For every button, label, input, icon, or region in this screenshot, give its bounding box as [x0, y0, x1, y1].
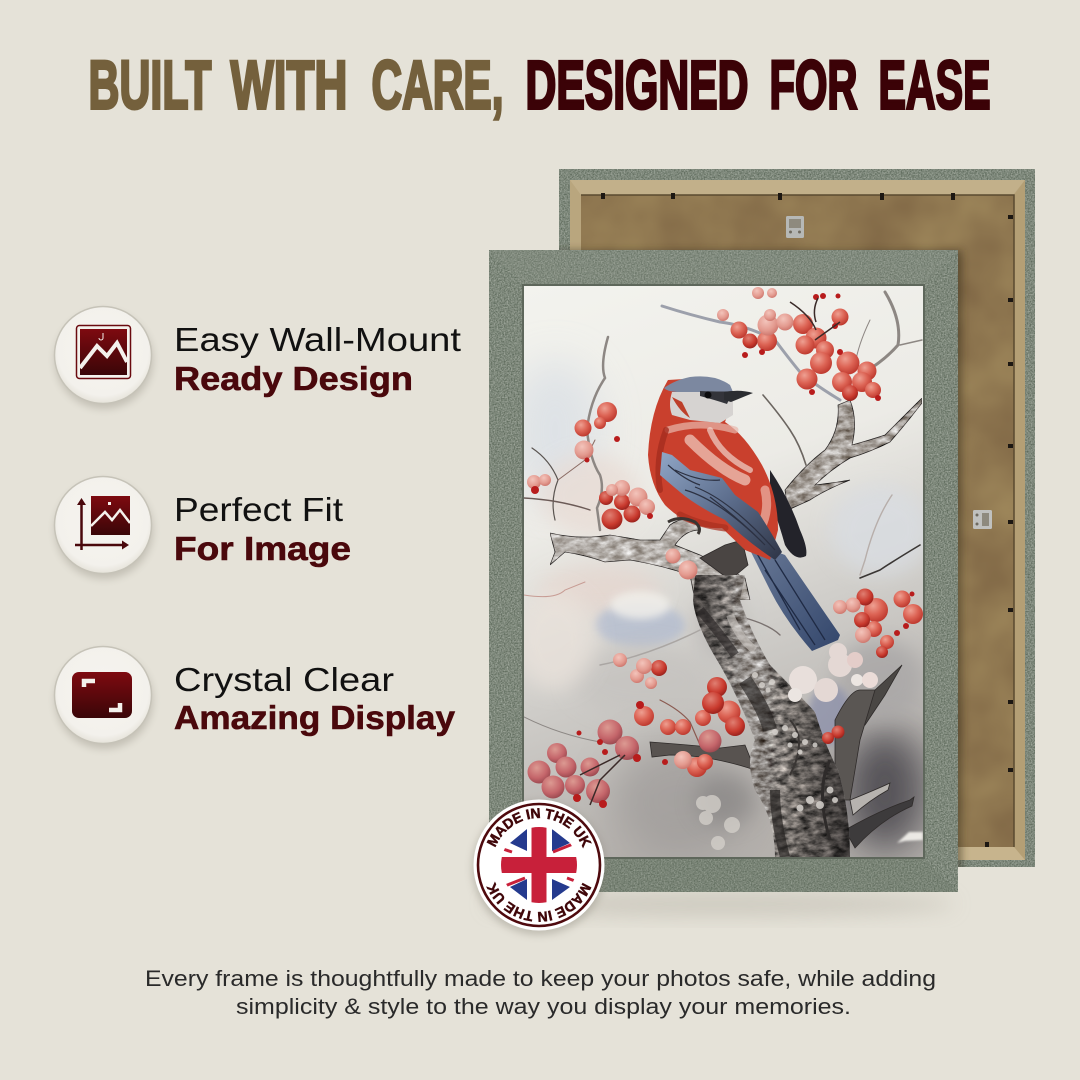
icon: display screen	[54, 646, 153, 749]
feature: crystal clear	[54, 646, 456, 749]
text: perfect fit: Perfect Fit	[174, 491, 343, 528]
caption: Every frame is thoughtfully made to keep your photos safe, while adding	[145, 966, 936, 991]
badge: made in the uk	[469, 800, 606, 938]
hanger top	[786, 216, 804, 238]
front frame shadow	[559, 246, 966, 867]
hanger right	[973, 510, 992, 529]
text: for image: For Image	[174, 530, 351, 567]
text: ready design: Ready Design	[174, 360, 413, 397]
title: WITH	[230, 46, 348, 124]
flag: union jack	[500, 826, 578, 904]
staples	[601, 193, 1013, 847]
title: CARE,	[372, 46, 504, 124]
watercolor background	[510, 286, 930, 860]
badge text	[486, 808, 592, 922]
front frame moulding	[489, 250, 958, 892]
text: crystal clear: Crystal Clear	[174, 661, 394, 698]
badge text: MADE IN THE UK	[486, 808, 592, 848]
text: easy wall-mount: Easy Wall-Mount	[174, 321, 461, 358]
breast streaks	[658, 425, 767, 530]
title: EASE	[878, 46, 990, 124]
eye	[704, 392, 712, 398]
caption: simplicity & style to the way you display your memories.	[236, 994, 851, 1019]
beak	[724, 391, 753, 402]
feature: easy wall-mount	[54, 306, 461, 409]
badge text: MADE IN THE UK	[486, 882, 592, 922]
title: BUILT	[88, 46, 212, 124]
frame product illustration	[469, 169, 1035, 938]
title: FOR	[770, 46, 858, 124]
icon: image with dimension arrows	[54, 476, 153, 579]
tail	[751, 552, 840, 651]
caption	[145, 966, 936, 1019]
thin twigs	[524, 292, 922, 745]
title: DESIGNED	[526, 46, 748, 124]
floor shadow	[485, 892, 955, 916]
branches	[550, 398, 922, 848]
body	[648, 378, 778, 560]
upper wing	[660, 452, 782, 560]
icon: wall-mount picture	[54, 306, 153, 409]
feature: perfect fit	[54, 476, 351, 579]
back of frame	[559, 169, 1035, 867]
face	[670, 392, 733, 423]
feet	[668, 518, 699, 534]
dark wing tip	[770, 470, 806, 558]
title	[88, 46, 990, 124]
tree trunk	[693, 575, 850, 857]
berries	[527, 287, 923, 808]
head cap	[664, 376, 733, 392]
bird	[648, 376, 840, 651]
blossom flowers	[788, 643, 878, 702]
painting: bird on branch	[510, 286, 930, 860]
text: amazing display: Amazing Display	[174, 699, 456, 736]
